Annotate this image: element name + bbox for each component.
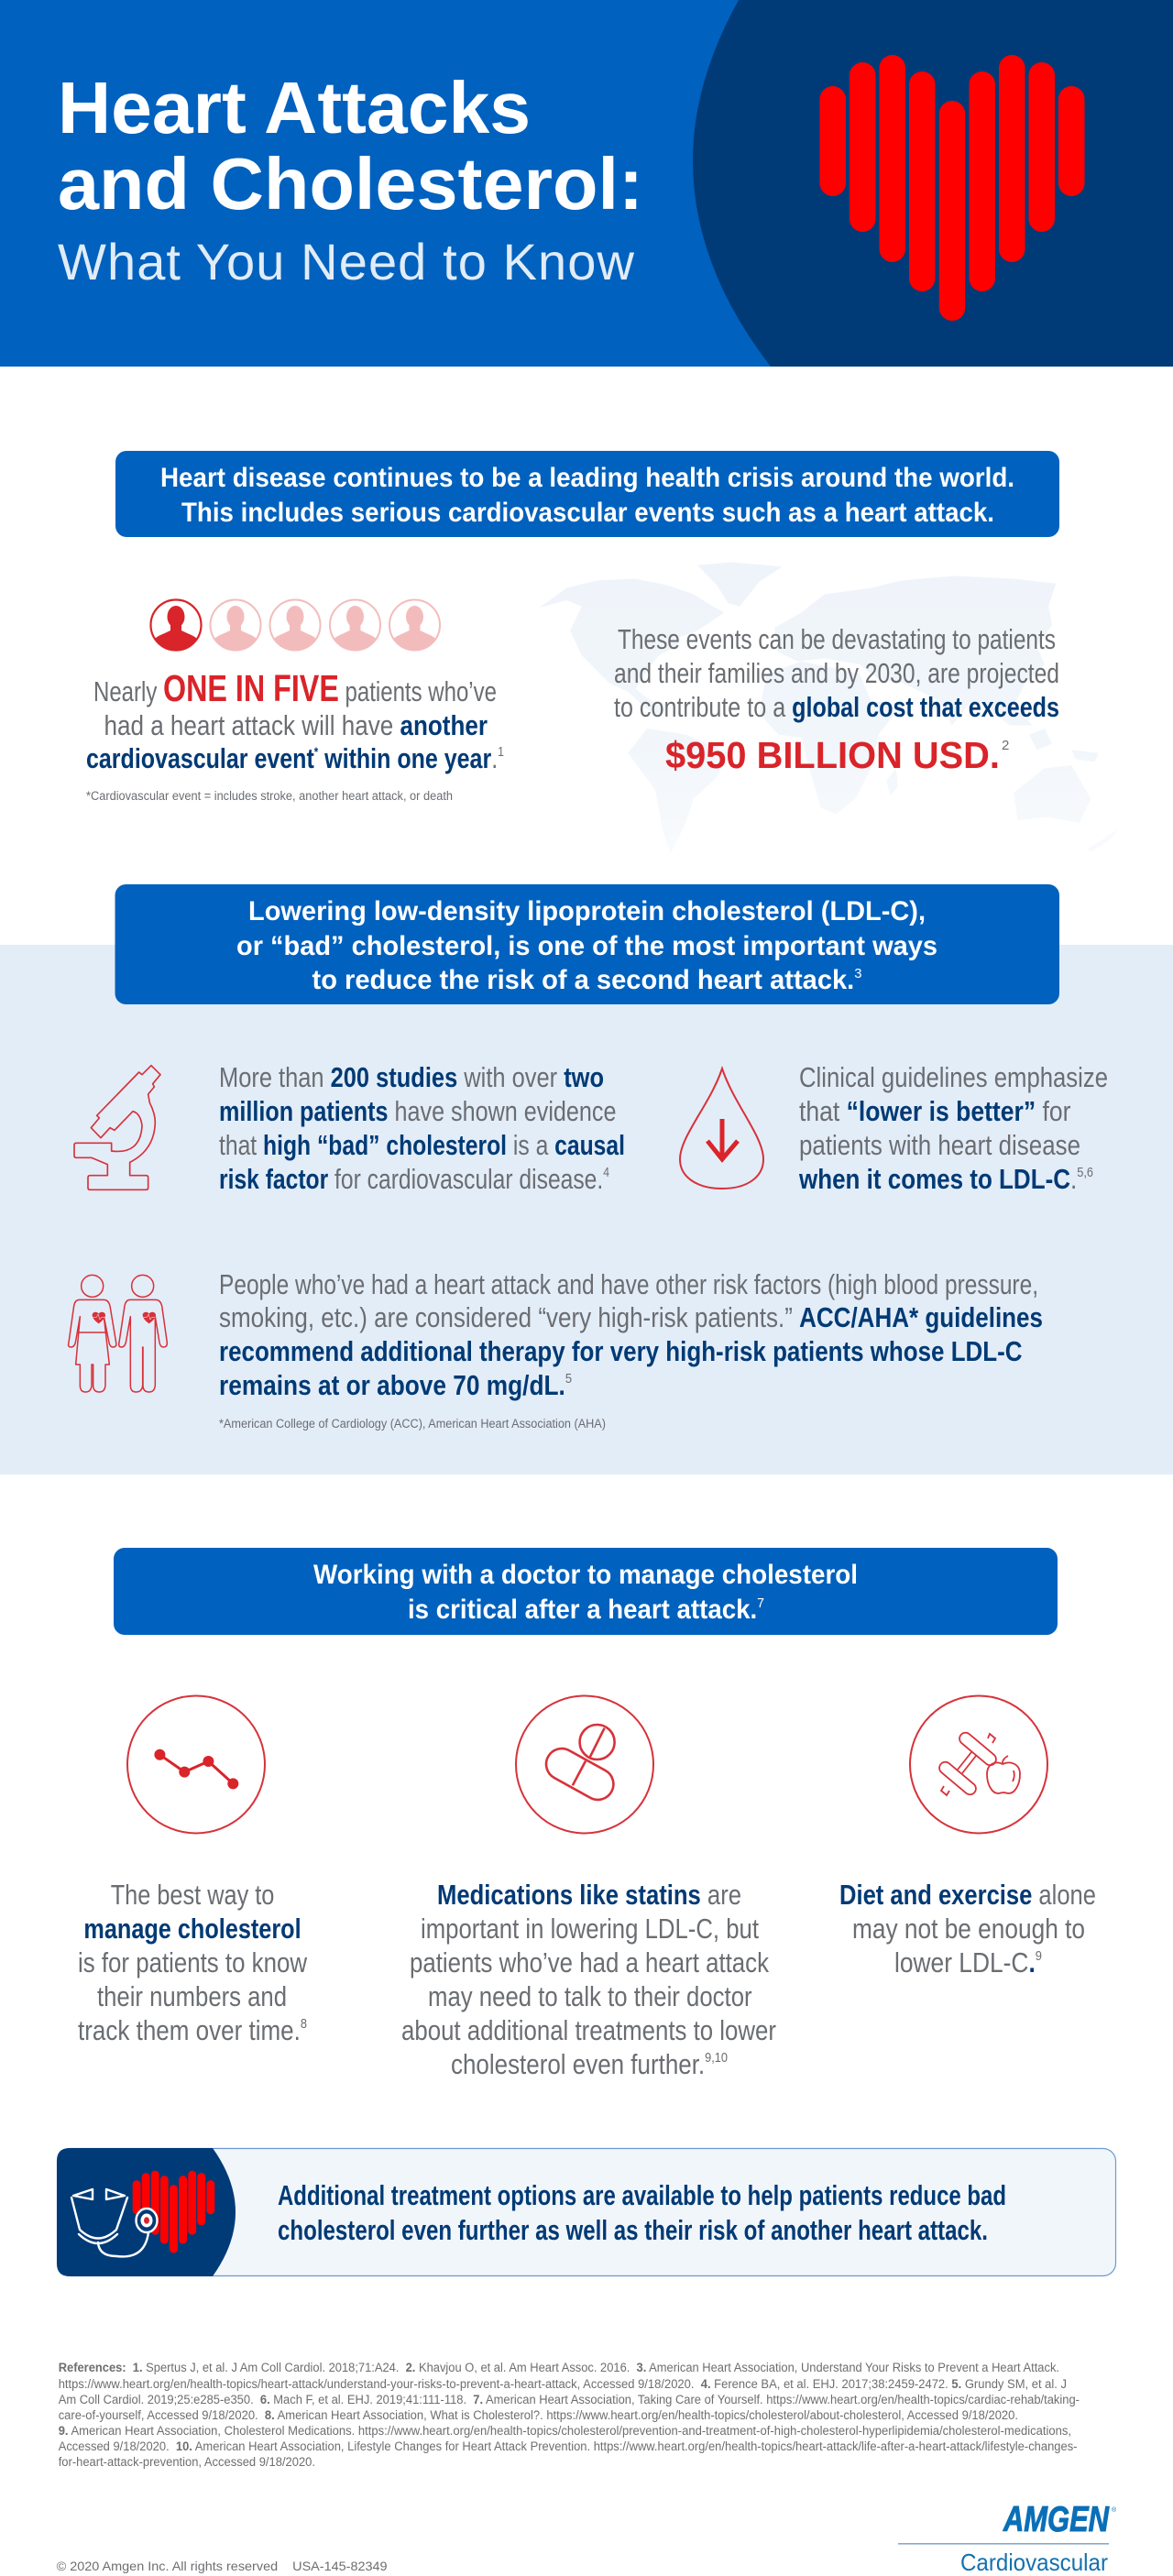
stat: 950 billion: 2 <box>1002 738 1009 753</box>
heading box: lowering LDL-C: 3 <box>854 966 861 981</box>
text: one in five: cardiovascular event <box>86 743 314 774</box>
text: one in five: had a heart attack will have another <box>104 710 488 741</box>
header banner <box>0 0 1173 367</box>
text: diet and exercise: Diet and exercise alone <box>839 1880 1096 1911</box>
text: medications like statins <box>401 1880 776 2080</box>
text: very high-risk patients <box>219 1269 1043 1401</box>
text: one in five: * <box>314 744 319 759</box>
stat: 950 billion: $950 BILLION USD. <box>665 734 1000 776</box>
callout text: cholesterol even further as well as their risk of another heart attack. <box>278 2215 988 2246</box>
text: lower is better: when it comes to LDL-C. <box>799 1164 1117 1195</box>
text: medications like statins: about additional treatments to lower <box>401 2015 776 2046</box>
text: manage cholesterol: is for patients to know <box>78 1947 308 1979</box>
references: References: 1. Spertus J, et al. J Am Coll Cardiol. 2018;71:A24. 2. Khavjou O, et al. Am Heart Assoc. 2016. 3. American Heart Association, Understand Your Risks to Prevent a Heart Attack. <box>59 2361 1059 2374</box>
text: very high-risk patients: remains at or above 70 mg/dL. <box>219 1370 565 1401</box>
text: 200 studies: that high “bad” cholesterol is a causal <box>219 1130 625 1161</box>
title: Heart Attacks <box>58 67 531 148</box>
text: very high-risk patients: 5 <box>565 1371 572 1387</box>
title: and Cholesterol: <box>58 143 643 225</box>
text: 200 studies: risk factor for cardiovascular disease. <box>219 1164 668 1195</box>
callout: additional treatment options <box>57 2148 1116 2276</box>
text: medications like statins: important in lowering LDL-C, but <box>421 1913 759 1945</box>
text: manage cholesterol: track them over time. <box>78 2015 339 2046</box>
text: diet and exercise: 9 <box>1036 1948 1042 1964</box>
heading box: lowering LDL-C: or “bad” cholesterol, is one of the most important ways <box>236 931 937 961</box>
text: manage cholesterol: 8 <box>301 2016 307 2032</box>
logo: Amgen Cardiovascular <box>898 2500 1117 2576</box>
heading box: heart disease crisis: Heart disease continues to be a leading health crisis around the world. <box>160 463 1014 493</box>
icon: pills in circle <box>516 1695 653 1833</box>
icon: faded person 4 <box>330 599 381 652</box>
icon: highlighted person <box>150 599 202 652</box>
text: 200 studies: million patients have shown evidence <box>219 1096 616 1127</box>
heading box: working with a doctor: 7 <box>757 1595 764 1611</box>
text: global cost: These events can be devastating to patients <box>618 624 1056 655</box>
icon: faded person 5 <box>389 599 440 652</box>
text: lower is better: that “lower is better” for <box>799 1096 1070 1127</box>
text: lower is better: patients with heart disease <box>799 1130 1080 1161</box>
references: 9. American Heart Association, Cholesterol Medications. https://www.heart.org/en/health-topics/cholesterol/prevention-and-treatment-of-high-cholesterol-hyperlipidemia/cholesterol-medications, <box>59 2424 1071 2438</box>
panel: light blue band <box>0 945 1173 1474</box>
heading box: working with a doctor: Working with a doctor to manage cholesterol <box>313 1560 858 1590</box>
text: lower is better: Clinical guidelines emphasize <box>799 1062 1108 1093</box>
header dark curved panel <box>693 0 1173 367</box>
heading box: lowering LDL-C <box>115 884 1059 1004</box>
references <box>59 2361 1080 2469</box>
text: very high-risk patients: smoking, etc.) are considered “very high-risk patients.” ACC/AHA* guidelines <box>219 1302 1043 1333</box>
text: manage cholesterol: The best way to <box>111 1880 274 1911</box>
icon: striped red heart <box>819 55 1085 321</box>
footnote: cardiovascular event: *Cardiovascular event = includes stroke, another heart attack, or death <box>86 789 453 803</box>
icon: mini heart bars <box>133 2171 214 2253</box>
heading box: lowering LDL-C: Lowering low-density lipoprotein cholesterol (LDL-C), <box>248 896 926 926</box>
copyright footer: © 2020 Amgen Inc. All rights reserved USA-145-82349 <box>57 2559 388 2573</box>
text: global cost: and their families and by 2030, are projected <box>614 658 1059 689</box>
references: https://www.heart.org/en/health-topics/heart-attack/understand-your-risks-to-prevent-a-heart-attack, Accessed 9/18/2020. 4. Ference BA, et al. EHJ. 2017;38:2459-2472. 5. Grundy SM, et al. J <box>59 2377 1067 2391</box>
icon row: one in five people <box>150 599 440 652</box>
text: medications like statins: patients who’ve had a heart attack <box>410 1947 770 1979</box>
text: one in five: 1 <box>498 744 504 760</box>
references: for-heart-attack-prevention, Accessed 9/18/2020. <box>59 2455 315 2469</box>
text: 200 studies: 4 <box>603 1165 609 1180</box>
logo: Amgen Cardiovascular: AMGEN <box>1003 2500 1110 2539</box>
heading box: heart disease crisis <box>115 451 1059 537</box>
text: medications like statins: cholesterol even further. <box>451 2049 750 2080</box>
title <box>58 67 643 290</box>
text: very high-risk patients: recommend additional therapy for very high-risk patients whose LDL-C <box>219 1336 1023 1367</box>
callout text <box>278 2180 1006 2246</box>
icon: tracking line chart in circle <box>127 1695 265 1833</box>
text: medications like statins: 9,10 <box>705 2050 728 2066</box>
text: medications like statins: may need to talk to their doctor <box>428 1981 752 2012</box>
logo: Amgen Cardiovascular: ® <box>1112 2506 1117 2514</box>
icon: stethoscope <box>71 2189 158 2256</box>
icon: dumbbell and apple in circle <box>910 1695 1047 1833</box>
heading box: lowering LDL-C: to reduce the risk of a second heart attack. <box>312 965 862 995</box>
icon: man and woman with hearts <box>69 1275 167 1392</box>
text: lower is better <box>798 1062 1108 1195</box>
text: manage cholesterol: their numbers and <box>97 1981 287 2012</box>
logo: Amgen Cardiovascular: Cardiovascular <box>960 2549 1108 2576</box>
text: diet and exercise <box>839 1880 1096 1979</box>
title: What You Need to Know <box>58 233 635 290</box>
references: Accessed 9/18/2020. 10. American Heart Association, Lifestyle Changes for Heart Attack Prevention. https://www.heart.org/en/health-topics/heart-attack/life-after-a-heart-attack/lifestyle-changes- <box>59 2439 1078 2453</box>
footnote: ACC AHA: *American College of Cardiology (ACC), American Heart Association (AHA) <box>219 1417 606 1431</box>
text: global cost <box>614 624 1059 723</box>
text: one in five: within one year <box>318 743 491 774</box>
heading box: working with a doctor: is critical after a heart attack. <box>408 1595 781 1625</box>
callout dark curved panel <box>57 2148 236 2276</box>
icon: faded person 3 <box>269 599 321 652</box>
text: lower is better: 5,6 <box>1077 1165 1093 1180</box>
heading box: heart disease crisis: This includes serious cardiovascular events such as a heart attack. <box>181 498 994 528</box>
icon: microscope <box>74 1066 160 1189</box>
icon: blood drop with down arrow <box>680 1069 763 1189</box>
icon: faded person 2 <box>210 599 261 652</box>
text: global cost: to contribute to a global cost that exceeds <box>614 692 1059 723</box>
text: diet and exercise: may not be enough to <box>852 1913 1085 1945</box>
references: care-of-yourself, Accessed 9/18/2020. 8. American Heart Association, What is Cholesterol?. https://www.heart.org/en/health-topics/cholesterol/about-cholesterol, Accessed 9/18/2020. <box>59 2408 1018 2422</box>
world map background <box>539 562 1118 854</box>
text: one in five <box>86 667 504 774</box>
heading box: working with a doctor <box>114 1548 1058 1635</box>
references: Am Coll Cardiol. 2019;25:e285-e350. 6. Mach F, et al. EHJ. 2019;41:111-118. 7. American Heart Association, Taking Care of Yourself. https://www.heart.org/en/health-topics/cardiac-rehab/taking- <box>59 2393 1080 2406</box>
text: manage cholesterol: manage cholesterol <box>83 1913 301 1945</box>
text: medications like statins: Medications like statins are <box>437 1880 741 1911</box>
text: 200 studies <box>219 1062 625 1195</box>
text: diet and exercise: lower LDL-C. <box>894 1947 1050 1979</box>
text: 200 studies: More than 200 studies with over two <box>219 1062 604 1093</box>
text: manage cholesterol <box>78 1880 308 2046</box>
text: one in five: . <box>491 743 499 774</box>
text: one in five: Nearly ONE IN FIVE patients who’ve <box>93 667 497 709</box>
